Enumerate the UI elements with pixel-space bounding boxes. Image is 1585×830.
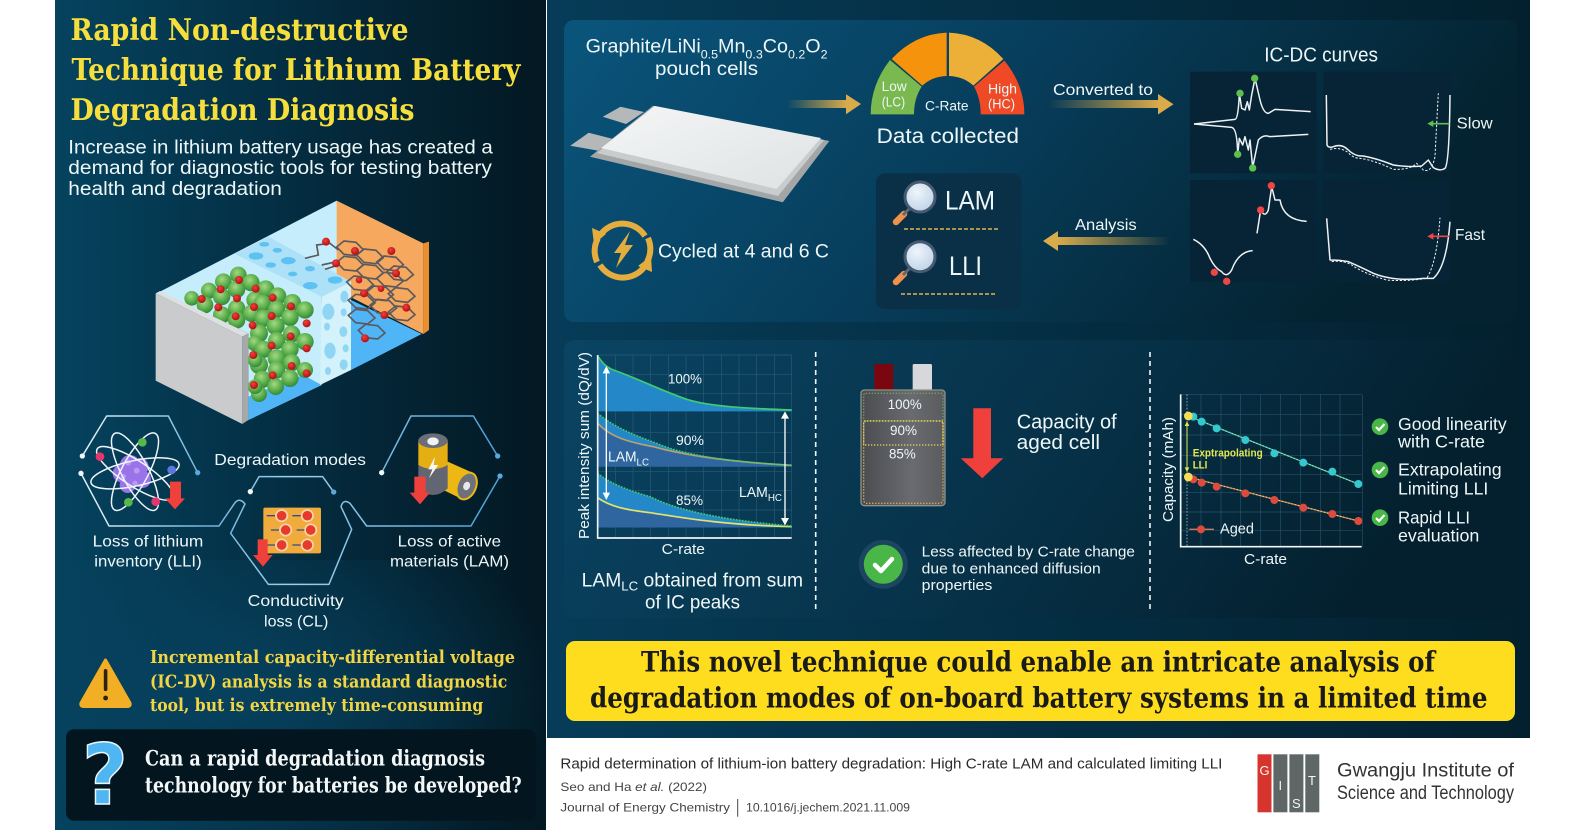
chart labels: LC <box>637 457 649 469</box>
chart labels: LAM <box>739 484 770 501</box>
label: conductivity loss: loss (CL) <box>264 614 328 631</box>
label: loss of active materials: Loss of active <box>398 534 501 551</box>
label: cell chemistry: 2 <box>821 47 828 61</box>
battery capacity labels <box>888 397 922 462</box>
caption: LAM LC: LC <box>621 579 638 594</box>
caption: LAM LC: LAM <box>582 571 621 592</box>
caption: LAM LC: of IC peaks <box>645 592 740 613</box>
intro text: health and degradation <box>68 179 282 200</box>
title: Rapid Non-destructive <box>70 12 408 47</box>
text: less affected: Less affected by C-rate change <box>922 544 1135 561</box>
warning text <box>150 647 515 716</box>
panel: LAM and LLI results <box>876 173 1022 309</box>
battery cutaway illustration <box>156 201 429 424</box>
label: cell chemistry: 0.5 <box>701 47 718 61</box>
finding: extrapolating limiting LLI: Extrapolating <box>1398 460 1502 480</box>
intro text: demand for diagnostic tools for testing battery <box>68 158 492 179</box>
gauge labels: (LC) <box>882 95 905 110</box>
text: less affected: due to enhanced diffusion <box>922 560 1101 577</box>
label: cell chemistry: O <box>805 36 821 57</box>
logo: GIST: T <box>1308 773 1316 788</box>
text: capacity of aged cell: aged cell <box>1017 432 1100 454</box>
gauge labels <box>882 79 1017 114</box>
title: Technique for Lithium Battery <box>72 52 521 87</box>
label: cell chemistry: Co <box>763 36 788 57</box>
chart labels: HC <box>768 492 782 504</box>
arrow: cell to gauge <box>787 94 861 114</box>
finding: good linearity: Good linearity <box>1398 414 1507 434</box>
title: Degradation Diagnosis <box>70 92 414 127</box>
chart labels: capacity: Capacity (mAh) <box>1160 417 1177 522</box>
intro text <box>68 137 493 200</box>
text: LAM: LAM <box>945 185 995 215</box>
arrow: analysis <box>1043 231 1170 251</box>
battery capacity labels: 85% <box>889 447 916 462</box>
chart labels: LAM <box>608 449 639 466</box>
footer: citation: Seo and Ha et al. (2022) <box>560 780 707 794</box>
arrow: capacity decrease <box>961 408 1003 478</box>
chart: IC-DC curves <box>1190 72 1450 285</box>
chart labels: capacity <box>1160 417 1287 568</box>
question text: Can a rapid degradation diagnosis <box>145 747 485 772</box>
finding: rapid LLI evaluation <box>1372 507 1479 546</box>
icon: aged cell battery <box>861 364 945 506</box>
icon: batteries with down arrow <box>410 433 481 504</box>
icon: atom with down arrow <box>88 427 185 516</box>
divider: LAM <box>904 228 999 230</box>
battery capacity labels: 100% <box>888 397 922 412</box>
footer: citation <box>560 756 1222 817</box>
gauge labels: C-Rate <box>925 99 968 114</box>
label: conductivity loss <box>248 593 344 631</box>
icon: magnifier LLI <box>896 242 935 282</box>
caption: LAM LC <box>582 571 803 613</box>
chart labels: C-rate <box>662 541 705 558</box>
title <box>70 12 521 127</box>
icon: warning triangle <box>81 660 130 706</box>
panel: right column background <box>547 0 1530 738</box>
gauge labels: Low <box>882 79 907 94</box>
banner: conclusion <box>566 641 1515 721</box>
degradation modes hexagon frame <box>78 416 503 584</box>
text: LLI: LLI <box>949 251 982 281</box>
logo: GIST: I <box>1278 778 1282 793</box>
logo: GIST: S <box>1292 796 1301 811</box>
label: data collected: Data collected <box>877 125 1019 148</box>
finding: good linearity <box>1372 414 1507 451</box>
warning text: Incremental capacity-differential voltage <box>150 647 515 668</box>
icon: large check <box>859 540 908 589</box>
label: loss of lithium inventory: Loss of lithium <box>93 534 203 551</box>
gauge: C-rate <box>871 33 1024 114</box>
finding: extrapolating limiting LLI: Limiting LLI <box>1398 478 1488 498</box>
label: cell chemistry: 0.2 <box>788 47 806 61</box>
chart labels: capacity: LLI <box>1193 459 1207 471</box>
findings list <box>1372 414 1507 546</box>
text: less affected: properties <box>922 577 992 594</box>
divider: LLI <box>901 293 996 295</box>
icon: conductivity chip with down arrow <box>253 508 321 567</box>
chart labels: Peak intensity sum (dQ/dV) <box>576 352 593 539</box>
label: loss of active materials: materials (LAM) <box>390 554 509 571</box>
finding: rapid LLI evaluation: Rapid LLI <box>1398 507 1470 527</box>
chart labels: capacity: Exptrapolating <box>1193 448 1263 460</box>
label: loss of lithium inventory: inventory (LLI) <box>94 554 202 571</box>
chart labels: capacity: C-rate <box>1244 551 1287 568</box>
heading: IC-DC curves: IC-DC curves <box>1264 45 1378 67</box>
footer: citation: Journal of Energy Chemistry <box>560 800 730 814</box>
question text: technology for batteries be developed? <box>145 773 522 798</box>
label: cell chemistry: Mn <box>718 36 745 57</box>
icon: magnifier LAM <box>896 182 935 222</box>
logo: GIST: Science and Technology <box>1337 783 1514 804</box>
gauge labels: (HC) <box>988 96 1015 111</box>
label: fast: Fast <box>1455 227 1486 244</box>
label: loss of lithium inventory <box>93 534 203 571</box>
label: cell chemistry <box>586 36 828 80</box>
label: cycled at 4 and 6 C: Cycled at 4 and 6 C <box>658 241 829 262</box>
chart labels: 90% <box>676 433 704 448</box>
intro text: Increase in lithium battery usage has created a <box>68 137 493 158</box>
label: conductivity loss: Conductivity <box>248 593 344 610</box>
icon: question mark: ? <box>82 726 128 824</box>
chart labels: 85% <box>676 493 703 508</box>
panel: top workflow <box>564 20 1517 322</box>
question text <box>145 747 522 798</box>
label: slow: Slow <box>1457 115 1493 132</box>
panel: research question <box>66 726 536 824</box>
logo: GIST: G <box>1260 763 1270 778</box>
warning text: tool, but is extremely time-consuming <box>150 695 484 716</box>
label: cell chemistry: Graphite/LiNi <box>586 36 696 57</box>
arrow: converted to <box>1048 94 1174 114</box>
chart: capacity vs C-rate <box>1181 394 1362 547</box>
icon: cycling bolt <box>592 224 652 278</box>
finding: rapid LLI evaluation: evaluation <box>1398 526 1479 546</box>
logo: GIST <box>1258 754 1515 812</box>
caption: LAM LC: obtained from sum <box>638 571 803 592</box>
finding: extrapolating limiting LLI <box>1372 460 1502 498</box>
footer: citation: Rapid determination of lithium-ion battery degradation: High C-rate LAM and calculated limiting LLI <box>560 756 1222 772</box>
finding: good linearity: with C-rate <box>1397 431 1485 451</box>
logo: GIST: Gwangju Institute of <box>1337 761 1515 782</box>
label: cell chemistry: pouch cells <box>655 59 758 80</box>
gauge labels: High <box>988 81 1017 96</box>
divider: dashed right <box>1149 352 1151 613</box>
text: capacity of aged cell <box>1017 411 1117 454</box>
footer: citation: 10.1016/j.jechem.2021.11.009 <box>746 800 910 814</box>
illustration: pouch cell <box>570 106 829 202</box>
text: less affected <box>922 544 1135 594</box>
panel: left column background <box>55 0 546 830</box>
chart labels: capacity: Aged <box>1220 520 1254 537</box>
label: analysis: Analysis <box>1075 217 1137 234</box>
text: capacity of aged cell: Capacity of <box>1017 411 1117 433</box>
chart labels: 100% <box>668 371 702 386</box>
label: degradation modes: Degradation modes <box>214 452 366 469</box>
banner: conclusion: This novel technique could enable an intricate analysis of <box>641 646 1437 679</box>
label: loss of active materials <box>390 534 509 571</box>
chart: peak intensity sum vs C-rate <box>598 355 792 538</box>
banner: conclusion: degradation modes of on-board battery systems in a limited time <box>590 681 1488 714</box>
battery capacity labels: 90% <box>890 423 917 438</box>
chart labels <box>576 352 782 558</box>
label: converted to: Converted to <box>1053 82 1153 99</box>
label: cell chemistry: 0.3 <box>745 47 763 61</box>
warning text: (IC-DV) analysis is a standard diagnostic <box>150 671 507 692</box>
panel: bottom analysis <box>564 340 1517 618</box>
divider: dashed left <box>815 352 817 613</box>
